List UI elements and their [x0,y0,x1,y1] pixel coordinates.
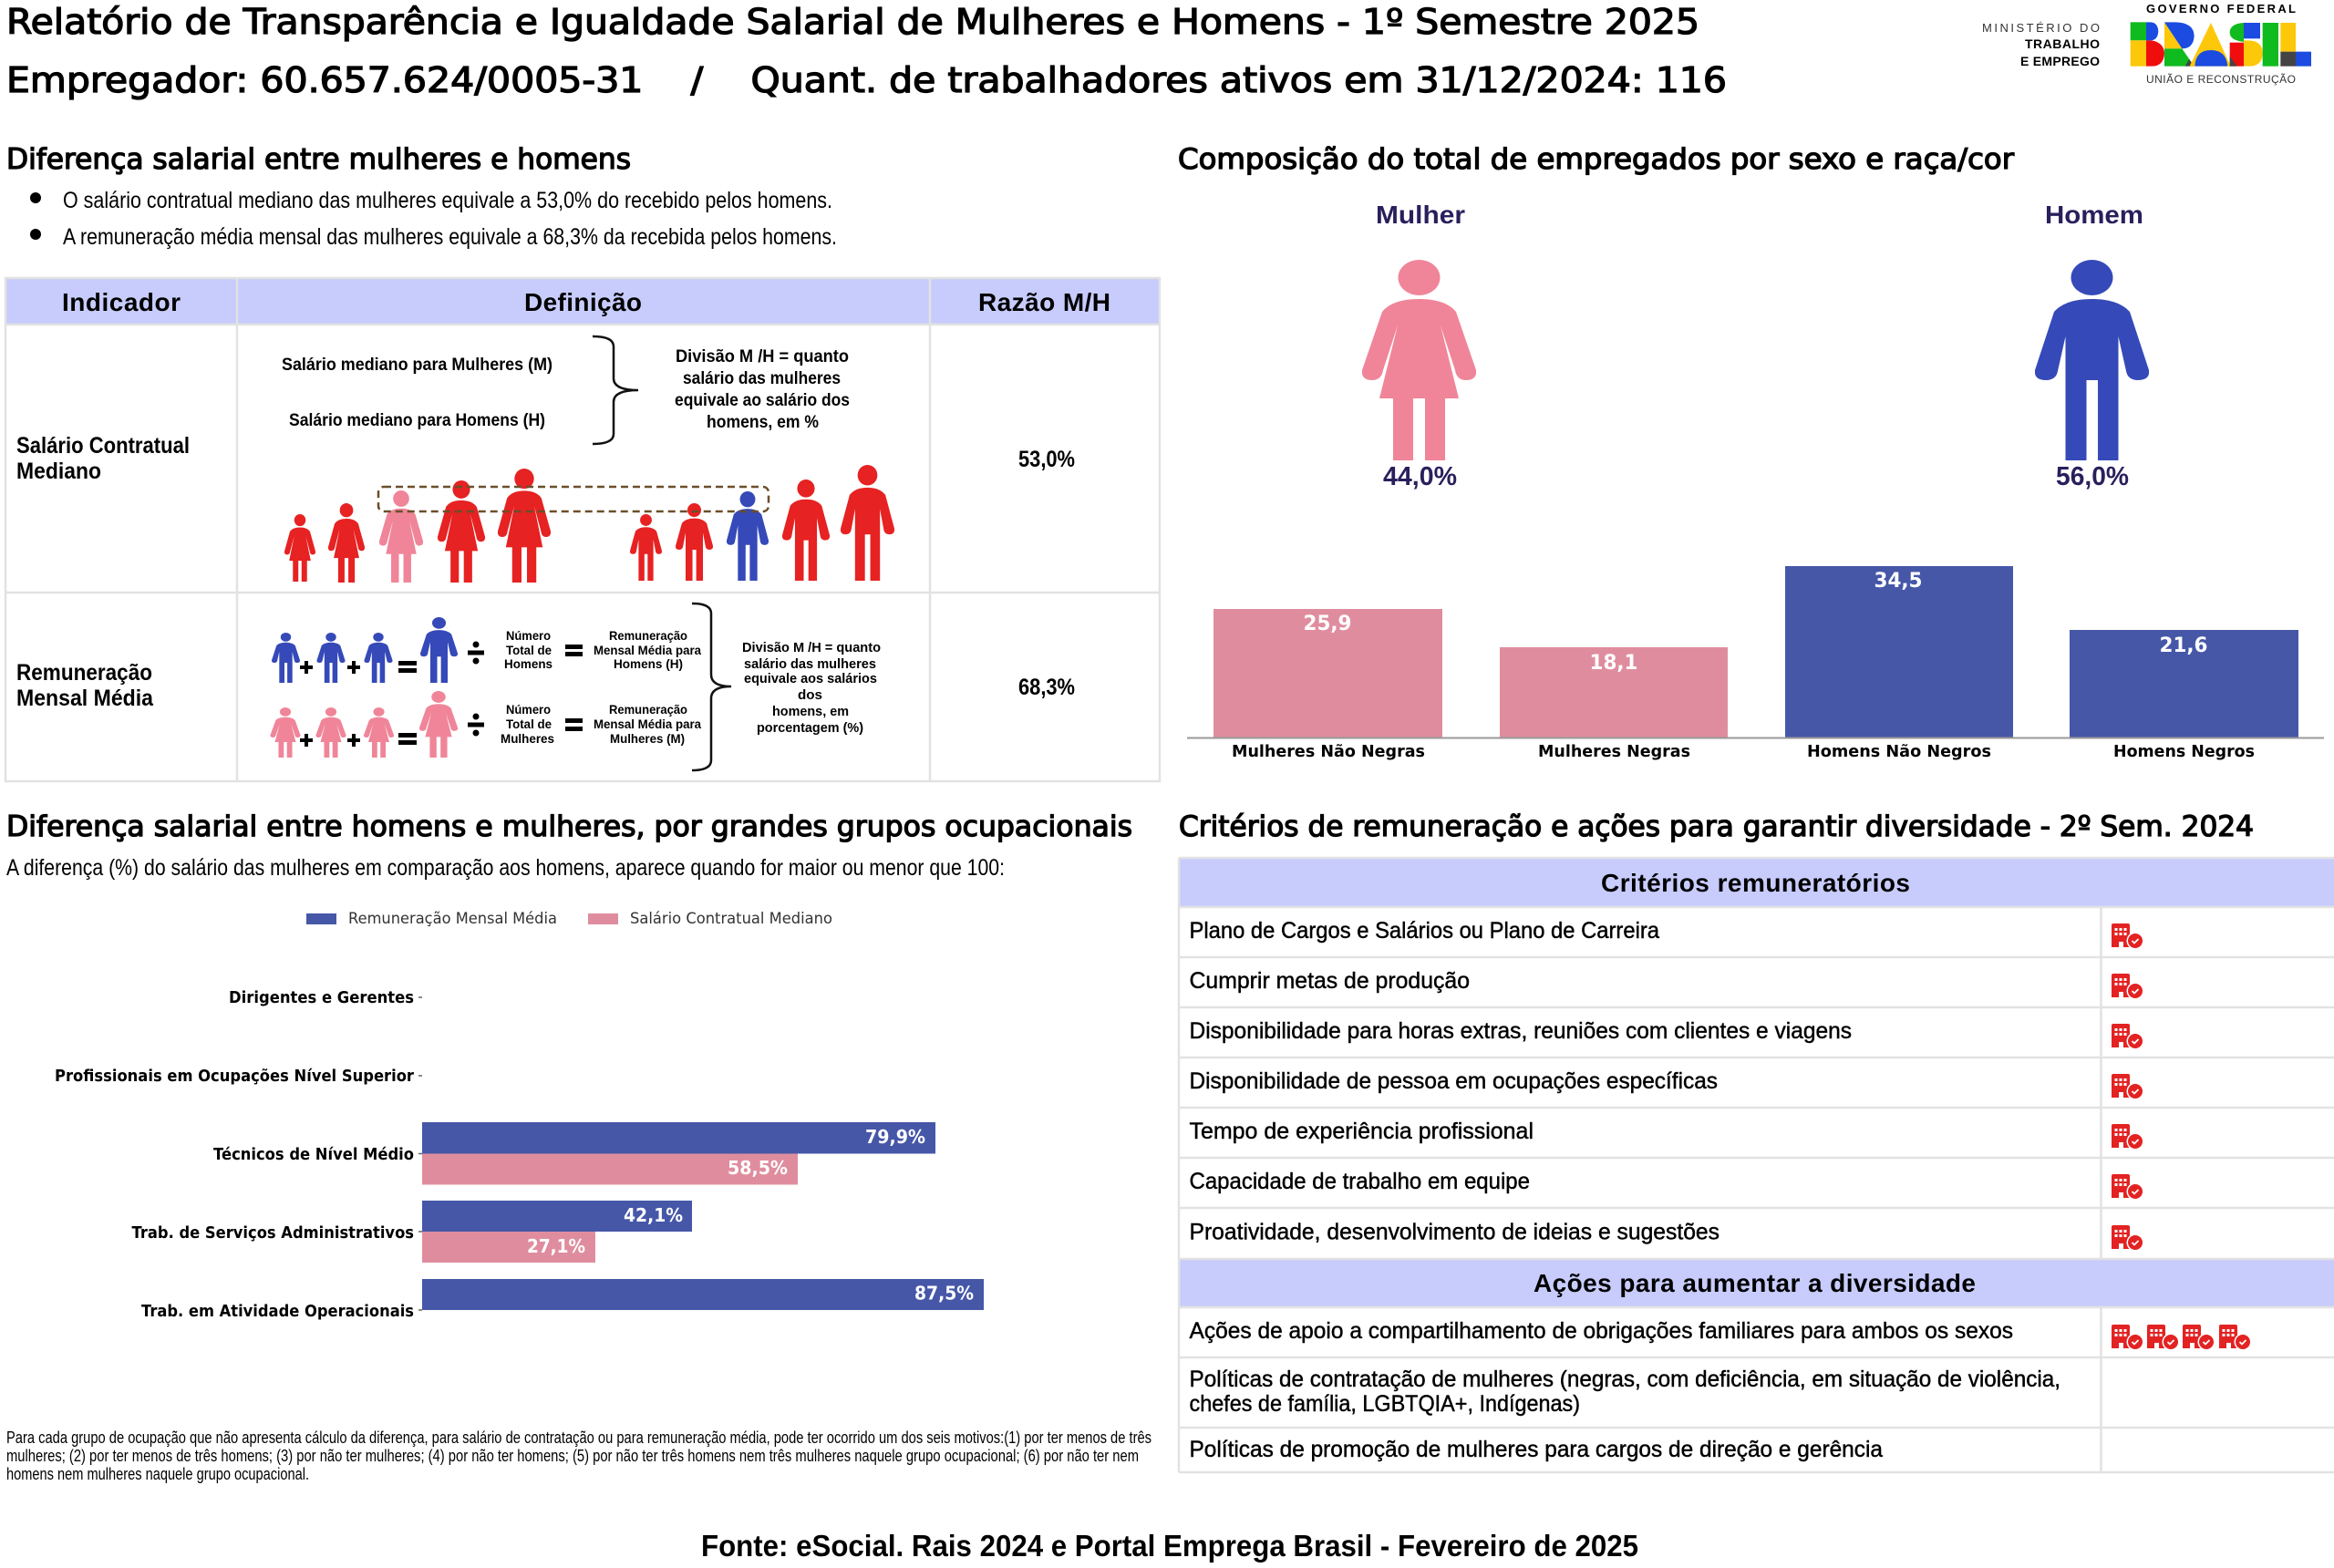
row: salário contratual mediano: equivale ao salário dos [675,391,850,410]
panel: criteria table: chefes de família, LGBTQIA+, Indígenas) [1189,1391,1580,1417]
bar chart: sex and race composition: 18,1 [1590,652,1637,675]
panel: woman share [1362,201,1476,491]
text block: key salary bullets: O salário contratual mediano das mulheres equivale a 53,0% do recebido pelos homens. [63,188,832,213]
icon row: men salary sum [272,617,583,683]
row: salário contratual mediano: Salário Contratual [16,433,190,459]
panel: criteria table [1179,858,2334,1472]
bar chart: occupational groups: 27,1% [527,1235,585,1257]
row: remuneração mensal média: salário das mulheres [744,656,876,672]
text block: footnote: homens nem mulheres naquele grupo ocupacional. [6,1465,309,1483]
logo: ministry and government: GOVERNO FEDERAL [2146,2,2296,15]
row: salário contratual mediano: homens, em % [707,413,819,432]
bar chart: occupational groups: 87,5% [914,1282,974,1304]
bar chart: sex and race composition: 34,5 [1874,570,1922,593]
row: remuneração mensal média: porcentagem (%) [757,720,863,736]
bar chart: occupational groups: 58,5% [728,1157,788,1179]
row: remuneração mensal média: Homens [504,656,553,671]
row: remuneração mensal média: dos [798,687,822,703]
row: remuneração mensal média: Mensal Média [16,686,154,711]
bar chart: occupational groups [55,988,984,1321]
panel: indicator table: Definição [524,288,642,316]
row: remuneração mensal média: Mensal Média para [594,717,701,731]
icons: company markers [2112,923,2252,1351]
panel: criteria table: Políticas de contratação de mulheres (negras, com deficiência, em situação de violência, [1189,1367,2060,1392]
bar chart: sex and race composition: Homens Não Negros [1807,742,1991,761]
text block: footnote: mulheres; (2) por ter menos de três homens; (3) por não ter mulheres; (4) por não ter homens; (5) por não ter três homens nem três mulheres naquele grupo ocupacional; (6) por não ter nem [6,1447,1139,1465]
logo: ministry and government: UNIÃO E RECONSTRUÇÃO [2146,73,2296,86]
row: salário contratual mediano: Divisão M /H = quanto [676,347,849,366]
panel: criteria table: Ações para aumentar a diversidade [1534,1269,1976,1297]
bar chart: occupational groups: 42,1% [624,1204,683,1226]
panel: criteria table: Disponibilidade de pessoa em ocupações específicas [1189,1068,1718,1094]
bar chart: sex and race composition: Mulheres Não Negras [1232,742,1425,761]
row: salário contratual mediano: Mediano [16,459,101,484]
row: remuneração mensal média: Número [506,628,551,643]
panel: indicator table: Indicador [62,288,181,316]
text block: key salary bullets [30,188,837,250]
row: remuneração mensal média: Divisão M /H = quanto [742,640,881,655]
row: salário contratual mediano [16,336,1075,583]
panel: woman share: Mulher [1376,201,1465,229]
row: salário contratual mediano: Salário mediano para Homens (H) [289,411,545,430]
panel: man share: Homem [2045,201,2143,229]
bar chart: sex and race composition: Mulheres Negras [1538,742,1690,761]
bar chart: occupational groups: Profissionais em Ocupações Nível Superior [55,1067,414,1086]
bar chart: occupational groups: Trab. de Serviços Administrativos [131,1223,414,1243]
bar chart: sex and race composition: 21,6 [2159,634,2208,657]
row: remuneração mensal média: Total de [506,717,552,731]
bar chart: occupational groups: Trab. em Atividade Operacionais [141,1302,414,1321]
heading: occupational groups: Diferença salarial entre homens e mulheres, por grandes grupos ocupacionais [6,810,1132,843]
panel: indicator table [5,278,1160,781]
row: salário contratual mediano: Salário mediano para Mulheres (M) [282,356,553,375]
panel: man share: 56,0% [2056,462,2129,491]
bar chart: occupational groups: 79,9% [865,1126,925,1148]
bar chart: sex and race composition: Homens Negros [2113,742,2255,761]
bar chart: occupational groups: Técnicos de Nível Médio [213,1145,414,1164]
panel: criteria table: Tempo de experiência profissional [1189,1119,1534,1144]
panel: criteria table: Plano de Cargos e Salários ou Plano de Carreira [1189,918,1659,944]
logo: ministry and government: TRABALHO [2025,36,2100,51]
text block: footnote [6,1429,1152,1483]
row: remuneração mensal média [16,603,1075,770]
panel: criteria table: Capacidade de trabalho em equipe [1189,1169,1530,1194]
row: remuneração mensal média: Mulheres [501,731,554,746]
row: remuneração mensal média: Remuneração [609,628,687,643]
illustration: women and men ordered by salary [284,465,894,583]
panel: woman share: 44,0% [1383,462,1457,491]
legend: Remuneração Mensal Média [348,910,557,928]
heading: remuneration criteria: Critérios de remuneração e ações para garantir diversidade - 2º Sem. 2024 [1179,810,2254,843]
logo: ministry and government: MINISTÉRIO DO [1982,21,2100,35]
row: remuneração mensal média: Remuneração [609,702,687,717]
row: remuneração mensal média: Homens (H) [614,656,683,671]
title: report heading: Empregador: 60.657.624/0005-31 / Quant. de trabalhadores ativos em 31/12/2024: 116 [6,60,1727,100]
source line: Fonte: eSocial. Rais 2024 e Portal Emprega Brasil - Fevereiro de 2025 [701,1529,1638,1563]
row: salário contratual mediano: salário das mulheres [683,369,841,388]
text block: key salary bullets: A remuneração média mensal das mulheres equivale a 68,3% da recebida pelos homens. [63,224,837,250]
legend [306,910,832,928]
text block: chart explanation: A diferença (%) do salário das mulheres em comparação aos homens, aparece quando for maior ou menor que 100: [6,855,1005,881]
row: salário contratual mediano: 53,0% [1018,447,1075,472]
icon row: women salary sum [270,691,583,758]
panel: criteria table: Políticas de promoção de mulheres para cargos de direção e gerência [1189,1437,1883,1462]
heading: salary difference: Diferença salarial entre mulheres e homens [6,143,631,176]
row: remuneração mensal média: homens, em [772,704,849,719]
logo: ministry and government [1982,2,2311,86]
panel: man share [2035,201,2149,491]
panel: indicator table: Razão M/H [978,288,1110,316]
title: report heading: Relatório de Transparência e Igualdade Salarial de Mulheres e Homens - 1º Semestre 2025 [6,2,1699,42]
title: report heading [6,2,1727,100]
row: remuneração mensal média: Remuneração [16,660,152,686]
panel: criteria table: Ações de apoio a compartilhamento de obrigações familiares para ambos os sexos [1189,1318,2013,1344]
logo: ministry and government: E EMPREGO [2020,54,2100,68]
panel: criteria table: Disponibilidade para horas extras, reuniões com clientes e viagens [1189,1018,1852,1044]
row: remuneração mensal média: 68,3% [1018,675,1075,700]
heading: workforce composition: Composição do total de empregados por sexo e raça/cor [1178,143,2014,176]
row: remuneração mensal média: Mulheres (M) [610,731,685,746]
row: remuneração mensal média: equivale aos salários [744,671,877,686]
row: remuneração mensal média: Mensal Média para [594,643,701,657]
bar chart: sex and race composition: 25,9 [1304,613,1351,635]
row: remuneração mensal média: Número [506,702,551,717]
panel: criteria table: Critérios remuneratórios [1601,869,1910,897]
bar chart: occupational groups: Dirigentes e Gerentes [229,988,414,1007]
legend: Salário Contratual Mediano [630,910,832,928]
row: remuneração mensal média: Total de [506,643,552,657]
text block: footnote: Para cada grupo de ocupação que não apresenta cálculo da diferença, para salário de contratação ou para remuneração média, pode ter ocorrido um dos seis motivos:(1) por ter menos de três [6,1429,1152,1447]
bar chart: sex and race composition [1187,566,2324,761]
panel: criteria table: Proatividade, desenvolvimento de ideias e sugestões [1189,1220,1720,1245]
panel: criteria table: Cumprir metas de produção [1189,968,1470,994]
